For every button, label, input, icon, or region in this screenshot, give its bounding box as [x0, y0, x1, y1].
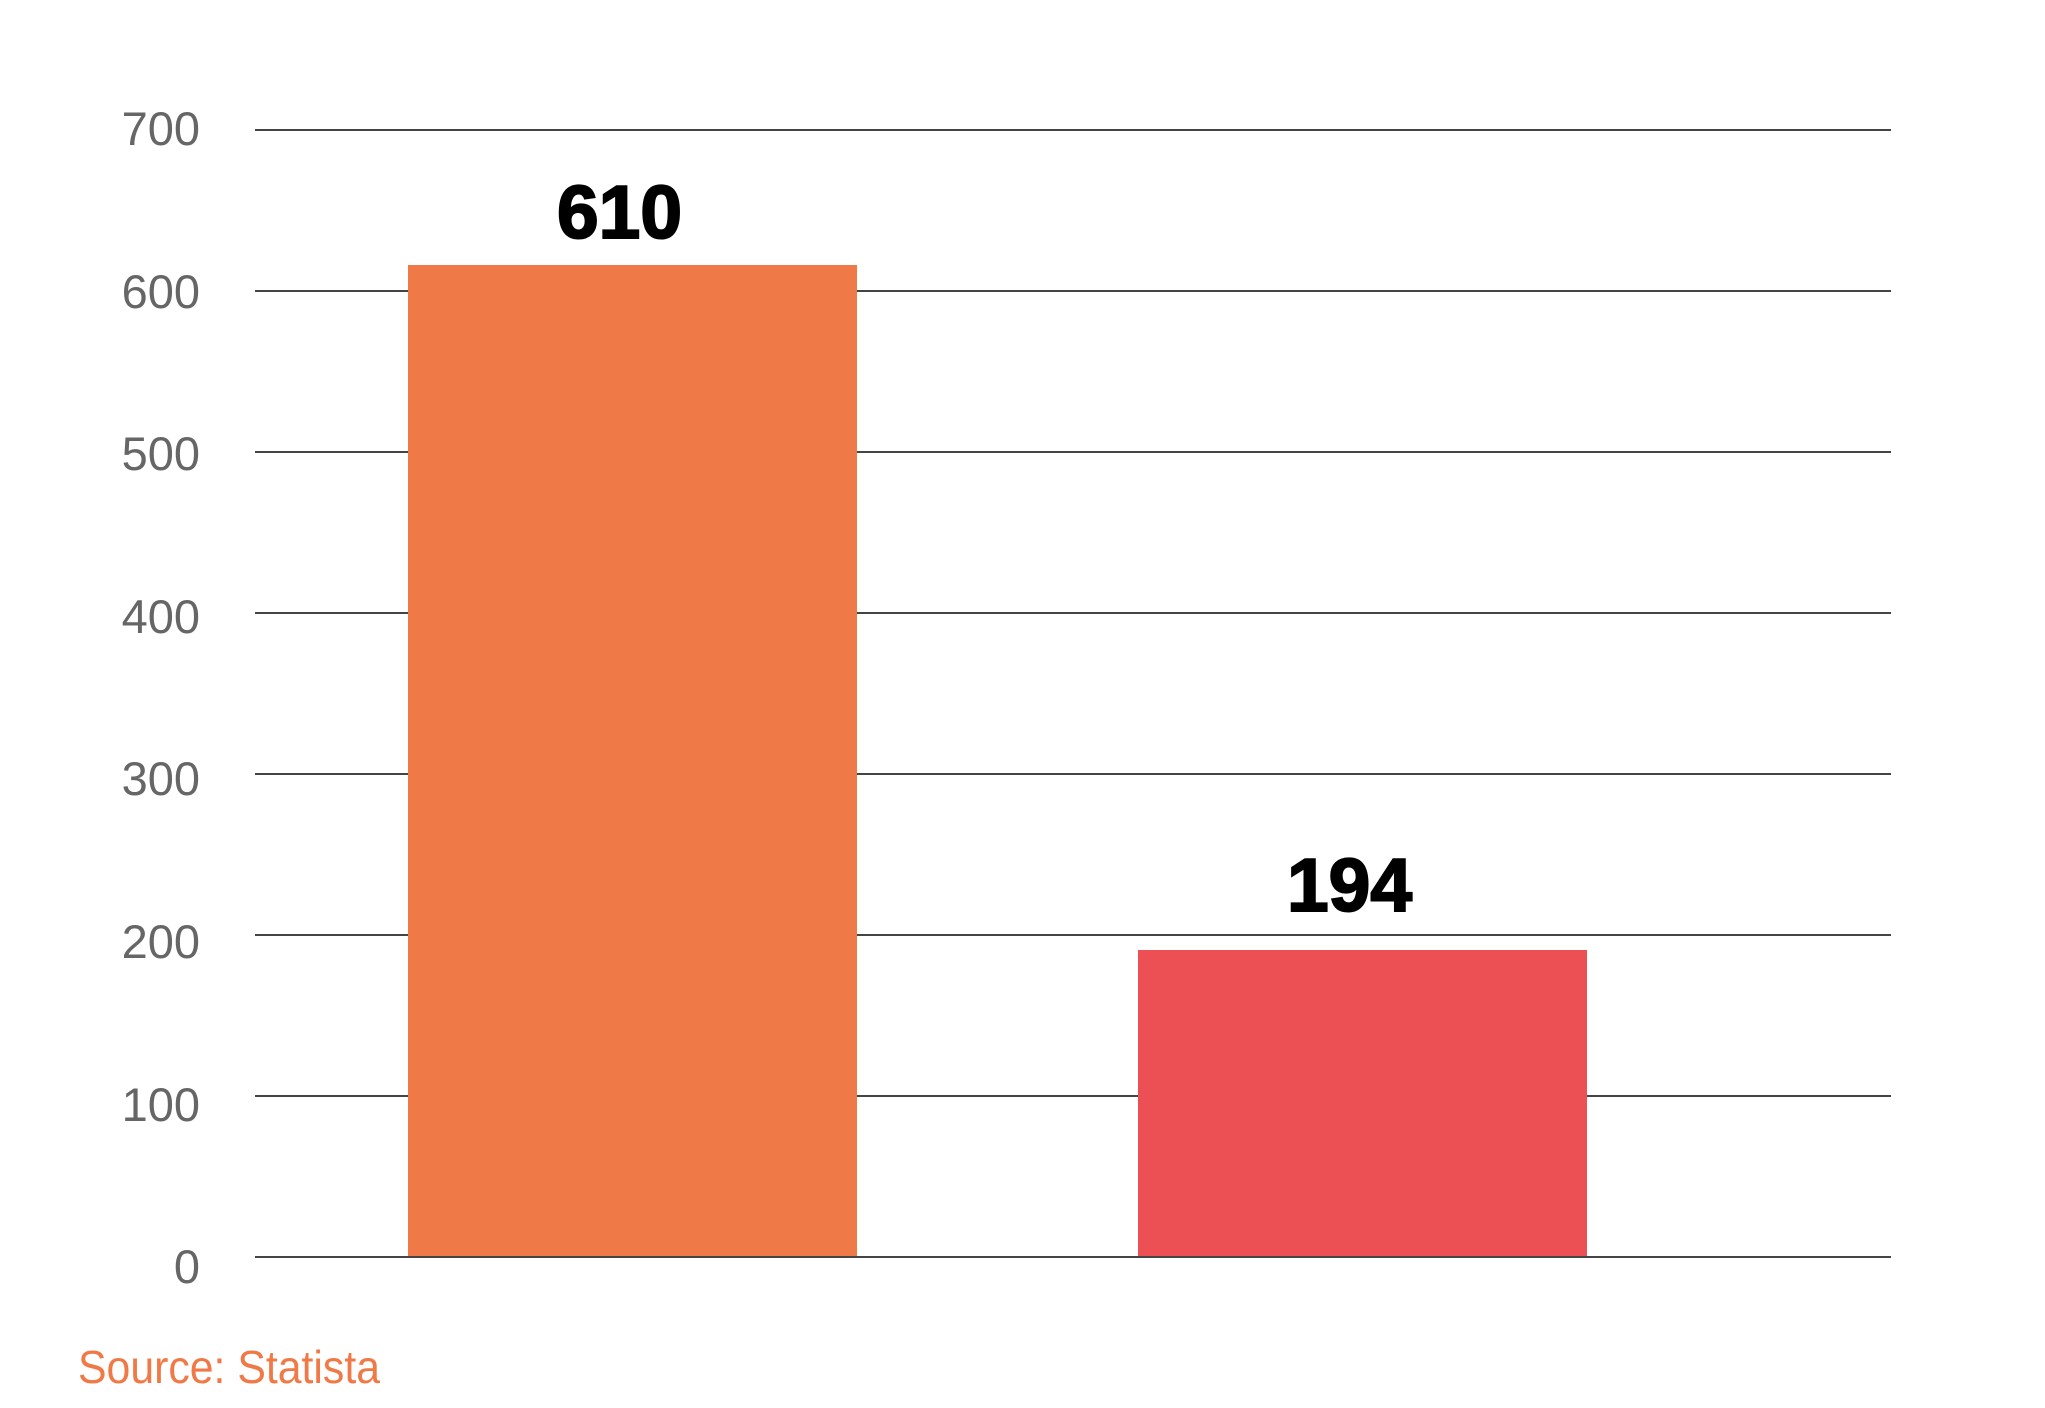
source note: Source: Statista — [78, 1341, 380, 1393]
y-axis labels: 200 — [122, 915, 200, 968]
y-axis labels: 500 — [122, 427, 200, 480]
bar: 610 — [408, 265, 857, 1256]
y-axis labels: 300 — [122, 752, 200, 805]
y-axis labels — [122, 102, 200, 1293]
y-axis labels: 600 — [122, 265, 200, 318]
y-axis labels: 100 — [122, 1078, 200, 1131]
y-axis labels: 400 — [122, 590, 200, 643]
y-axis labels: 700 — [122, 102, 200, 155]
value label: 194: 194 — [1287, 843, 1412, 927]
y-axis labels: 0 — [174, 1240, 200, 1293]
value label: 610: 610 — [557, 170, 682, 254]
bar: 194 — [1138, 950, 1587, 1256]
